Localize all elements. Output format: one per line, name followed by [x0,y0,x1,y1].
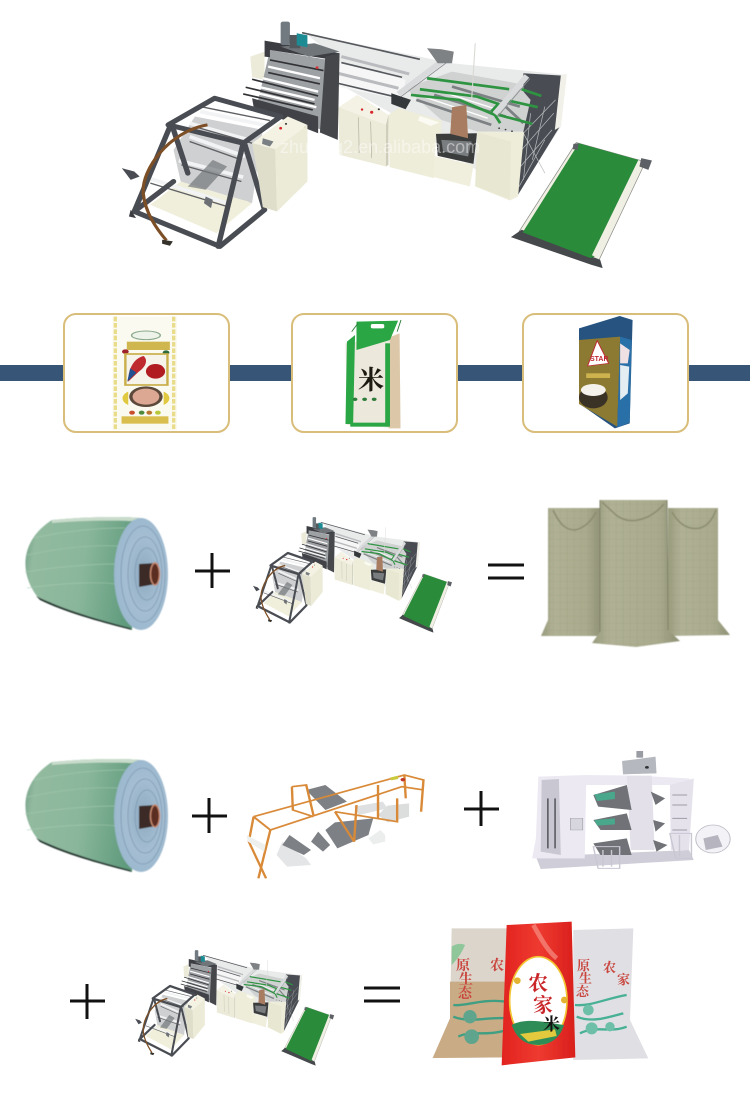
sack centre [592,500,680,647]
sack lettering: 生 [579,971,592,986]
sack lettering: 态 [576,984,590,999]
sack lettering: 米 [543,1015,560,1034]
sack lettering: 原 [456,957,471,974]
sack lettering: 农 [489,957,504,974]
sack centre [502,922,575,1065]
sack lettering: 家 [533,993,553,1017]
small machine [253,517,452,633]
sack lettering: 家 [617,972,630,987]
sack left [433,928,507,1058]
orange frame line [246,775,423,878]
printed rice sacks [433,922,648,1065]
row one: fabric roll [25,517,168,630]
main machine illustration [122,22,652,268]
sack lettering: 农 [527,972,548,995]
plus sign [464,791,499,826]
equals sign [488,565,524,578]
woven sacks [541,500,730,647]
icon: star brand rice bag [579,316,633,428]
sack left [541,508,602,636]
panel: sample bag two [292,314,457,432]
sack right [668,508,730,636]
sack lettering: 原 [577,958,591,973]
plus sign [70,984,105,1019]
banner bar [0,365,750,381]
bag brand: STAR [590,356,609,363]
sack lettering: 农 [602,960,616,975]
plus sign [192,798,227,833]
equals sign [364,988,400,1001]
plus sign [195,553,230,588]
sack lettering: 生 [459,972,473,988]
panel: sample bag three [523,314,688,432]
printing press [532,751,730,869]
bag lettering: 米 [358,366,384,395]
small machine [135,950,334,1066]
icon: parrot rice bag [112,317,177,430]
sack lettering: 态 [458,985,473,1002]
row two: fabric roll [25,759,168,872]
panel: sample bag one [64,314,229,432]
sack right [573,928,648,1060]
watermark: zhuding2.en.alibaba.com [280,137,480,157]
icon: green handle rice bag [345,320,401,428]
